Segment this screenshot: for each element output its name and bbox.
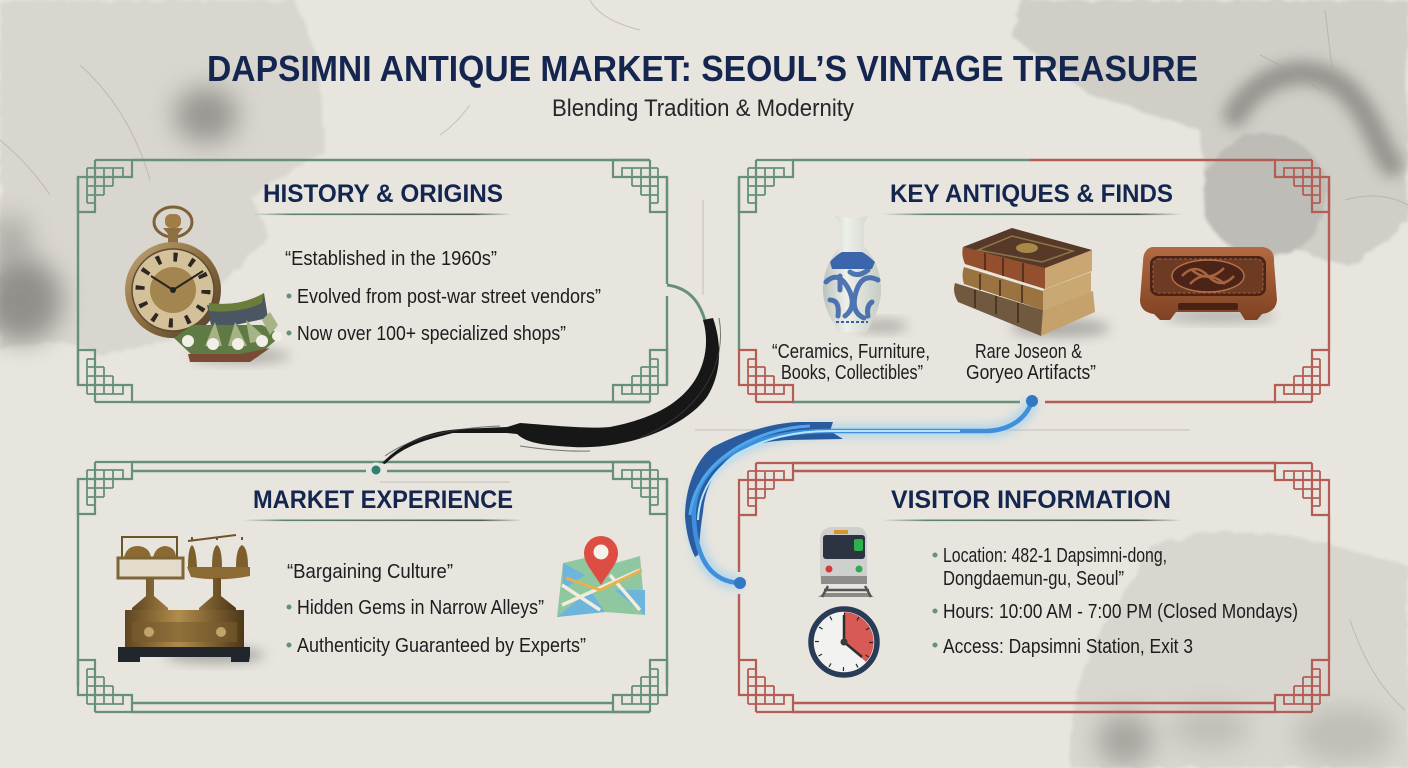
frame: market: [78, 462, 667, 712]
frame: visitor: [739, 463, 1329, 712]
frame: key antiques: [739, 160, 1329, 402]
bullet list: market: Hidden Gems in Narrow Alleys”: [297, 596, 544, 619]
bullet list: market: [286, 560, 586, 657]
heading: visitor: VISITOR INFORMATION: [891, 486, 1171, 514]
arrow: black ink brush connector: [370, 285, 721, 476]
bullet list: visitor: Dongdaemun-gu, Seoul”: [943, 567, 1124, 590]
heading: market: MARKET EXPERIENCE: [253, 486, 513, 514]
bullet list: market: “Bargaining Culture”: [287, 560, 453, 583]
panel: market experience: [78, 462, 667, 712]
icon: pocket watch: [125, 207, 221, 338]
icon: clock: [811, 609, 877, 675]
icon: antique brass scales: [118, 535, 265, 663]
frame: history: [78, 160, 667, 402]
bullet list: history: Now over 100+ specialized shops”: [297, 322, 566, 345]
bullet list: history: “Established in the 1960s”: [285, 247, 497, 270]
icon: stacked books: [954, 228, 1110, 337]
icon: carved wooden tray: [1140, 247, 1277, 322]
bullet list: visitor: Location: 482-1 Dapsimni-dong,: [943, 544, 1167, 567]
captions: key antiques: Goryeo Artifacts”: [966, 361, 1096, 384]
icon: roof tile: [174, 293, 290, 363]
captions: key antiques: Rare Joseon &: [975, 340, 1082, 363]
bullet list: visitor: Access: Dapsimni Station, Exit 3: [943, 635, 1193, 658]
arrow: glowing blue connector: [685, 395, 1038, 589]
captions: key antiques: [772, 340, 1096, 384]
heading: key antiques: KEY ANTIQUES & FINDS: [890, 180, 1173, 208]
panel: history and origins: [78, 160, 667, 402]
bullet list: history: [285, 247, 601, 345]
bullet list: market: Authenticity Guaranteed by Experts”: [297, 634, 586, 657]
icon: train: [818, 527, 874, 597]
panel: key antiques and finds: [739, 160, 1329, 402]
bullet list: visitor: [932, 544, 1298, 658]
heading: history: HISTORY & ORIGINS: [263, 180, 503, 208]
captions: key antiques: “Ceramics, Furniture,: [772, 340, 930, 363]
icon: map with pin: [557, 536, 645, 617]
bullet list: visitor: Hours: 10:00 AM - 7:00 PM (Closed Mondays): [943, 600, 1298, 623]
icon: vase: [823, 216, 908, 332]
bullet list: history: Evolved from post-war street vendors”: [297, 285, 601, 308]
captions: key antiques: Books, Collectibles”: [781, 361, 923, 384]
title: DAPSIMNI ANTIQUE MARKET: SEOUL’S VINTAGE TREASURE: [207, 48, 1198, 89]
subtitle: Blending Tradition & Modernity: [552, 95, 854, 122]
panel: visitor information: [739, 463, 1329, 712]
